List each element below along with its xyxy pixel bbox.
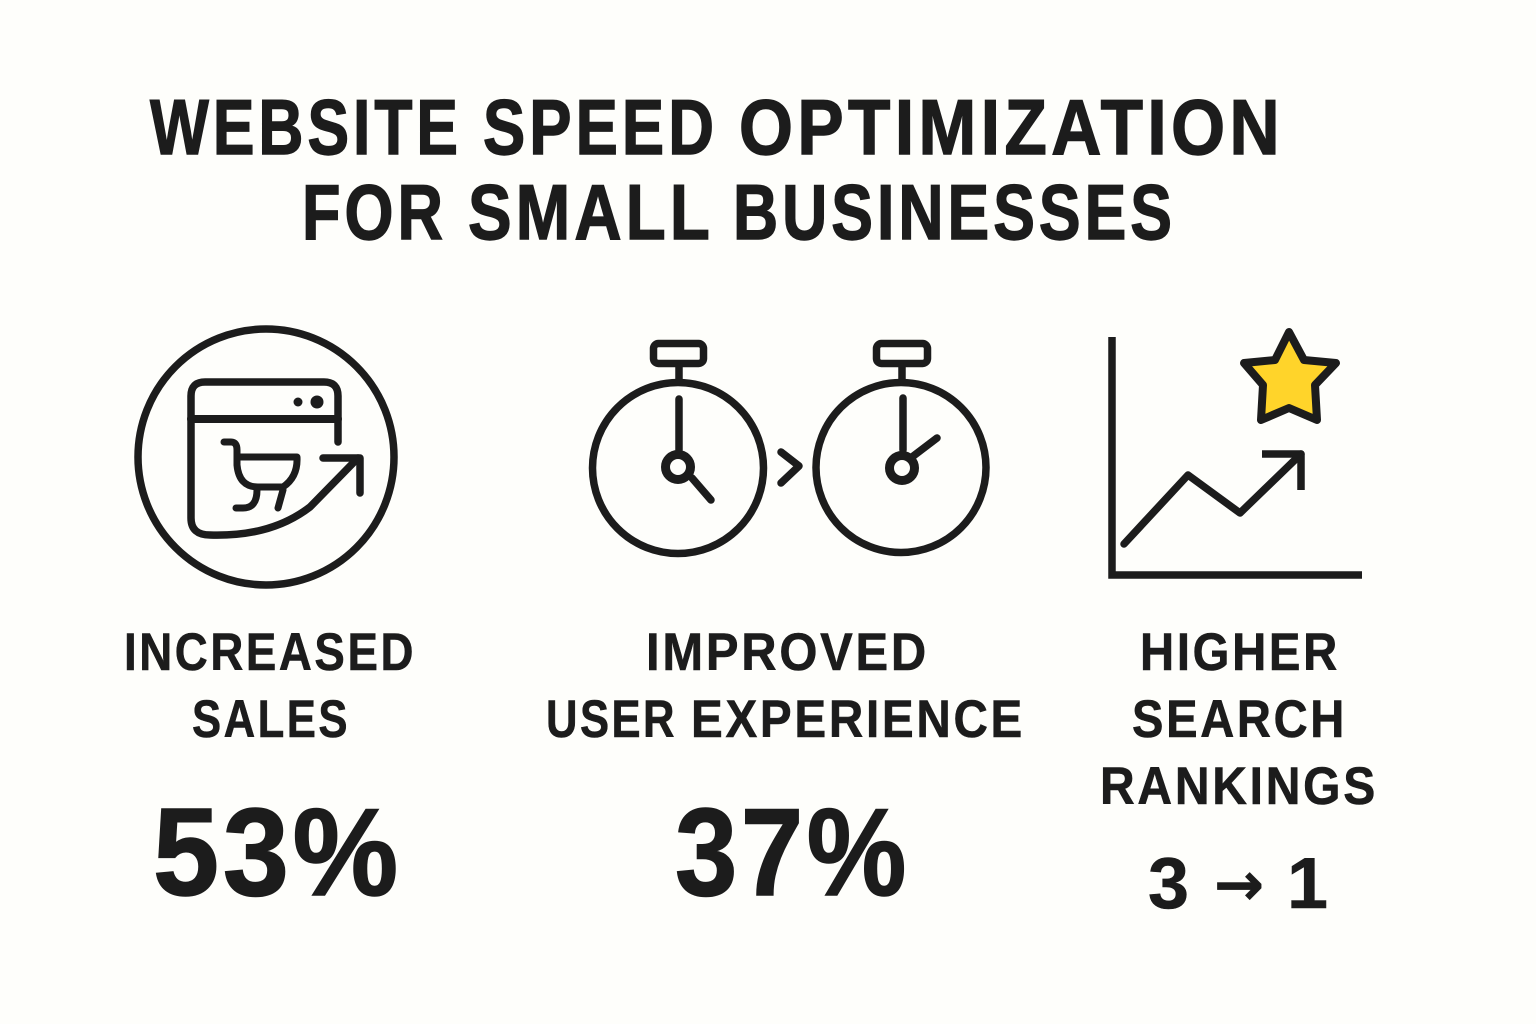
panel: improved user experience: USER: [546, 690, 677, 749]
icon: yellow star: [1244, 332, 1336, 420]
icon: stopwatch after: [816, 344, 986, 552]
title: SMALL: [468, 168, 714, 256]
title: SPEED: [483, 83, 718, 171]
stat: rank 3 to 1: [1148, 844, 1328, 924]
panel: increased sales: SALES: [192, 690, 350, 749]
stat: rank 3 to 1: 1: [1287, 844, 1328, 924]
icon: stopwatch before: [592, 344, 764, 554]
panel: higher search rankings: [1100, 332, 1378, 924]
icon: browser cart with growth arrow: [138, 329, 394, 585]
panel: improved user experience: [546, 344, 1025, 922]
title: FOR: [302, 168, 447, 256]
stat: 37%: 37%: [675, 784, 910, 922]
title: WEBSITE: [150, 83, 462, 171]
label: improved user experience: IMPROVED: [646, 623, 929, 682]
title: BUSINESSES: [733, 168, 1176, 256]
panel: increased sales: [124, 329, 416, 922]
panel: higher search rankings: RANKINGS: [1100, 757, 1378, 816]
icon: chart axes and rising line: [1112, 337, 1362, 575]
label: higher search rankings: HIGHER: [1140, 623, 1340, 682]
title: [150, 83, 1284, 256]
arrow: chevron: [781, 452, 799, 483]
stat: rank 3 to 1: →: [1214, 850, 1264, 920]
panel: higher search rankings: SEARCH: [1132, 690, 1347, 749]
title: OPTIMIZATION: [739, 83, 1284, 171]
stat: 53%: 53%: [153, 784, 402, 922]
panel: improved user experience: EXPERIENCE: [691, 690, 1025, 749]
label: increased sales: INCREASED: [124, 623, 416, 682]
stat: rank 3 to 1: 3: [1148, 844, 1189, 924]
